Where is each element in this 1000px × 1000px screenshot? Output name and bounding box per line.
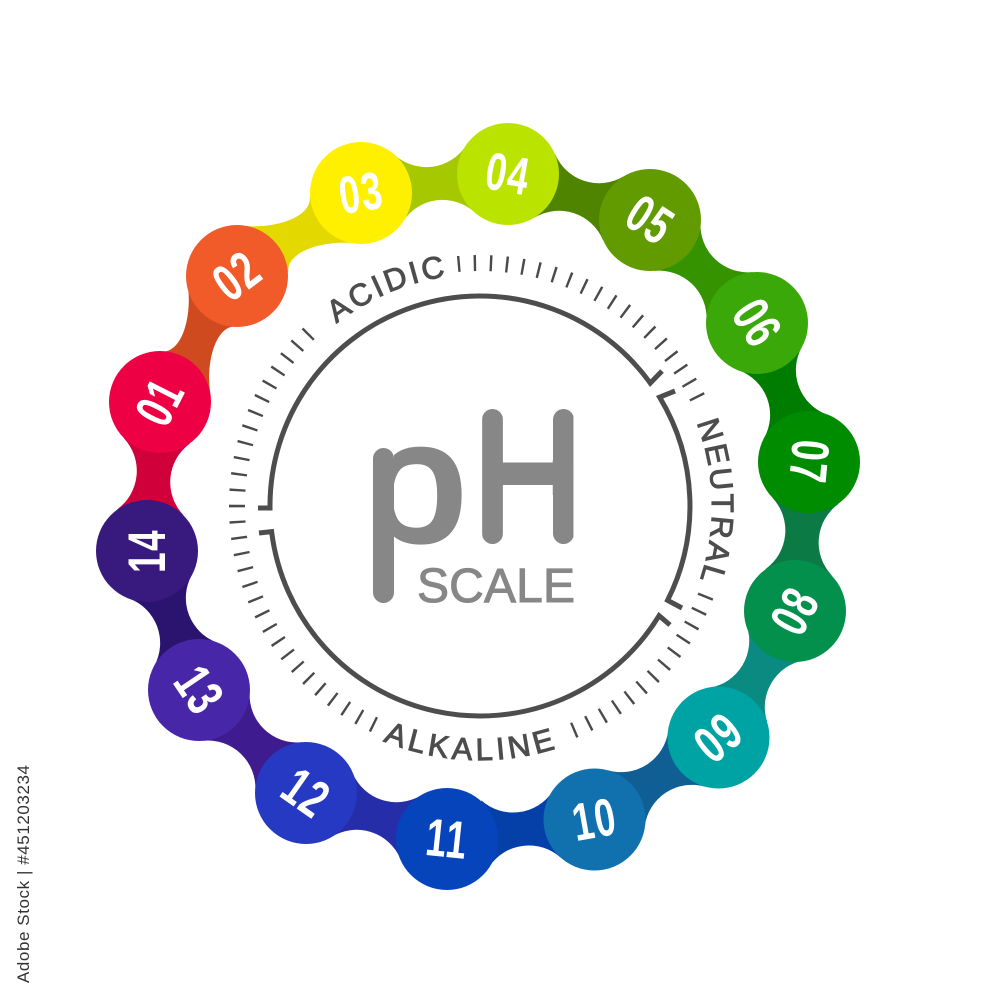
bead 11: 11 — [423, 807, 471, 871]
subtitle: scale: SCALE — [417, 560, 575, 613]
bead 13: 13 — [162, 655, 236, 725]
tick marks — [237, 263, 706, 730]
bead 03 — [310, 142, 412, 244]
bead 13 — [148, 639, 250, 741]
bead 03: 03 — [335, 160, 387, 226]
bead 05 — [599, 169, 701, 271]
title: pH: p — [360, 389, 466, 576]
bead 05: 05 — [615, 183, 685, 257]
bead 01 — [109, 351, 211, 453]
bead 14: 14 — [117, 529, 177, 573]
bead 10 — [544, 768, 646, 870]
title: pH: H — [473, 373, 583, 579]
bead 07 — [758, 411, 860, 513]
bead 10: 10 — [568, 787, 621, 852]
label: neutral: NEUTRAL — [696, 418, 734, 580]
bead 01: 01 — [124, 369, 196, 435]
bead 04 — [457, 123, 559, 225]
bead 06: 06 — [720, 289, 794, 357]
label: alkaline: ALKALINE — [382, 723, 556, 761]
stock id caption: Adobe Stock | #451203234 — [14, 765, 33, 983]
bead 08 — [744, 560, 846, 662]
bead 09: 09 — [683, 701, 754, 774]
bead 04: 04 — [481, 141, 535, 207]
bead 07: 07 — [778, 437, 840, 487]
bead 08: 08 — [759, 578, 831, 644]
bead 11 — [396, 788, 498, 890]
bead 02 — [186, 225, 288, 327]
chain links between pH beads — [117, 146, 839, 867]
bead 09 — [668, 686, 770, 788]
bead 12 — [255, 742, 357, 844]
inner bracket ring — [258, 296, 690, 716]
bead 06 — [706, 272, 808, 374]
bead 14 — [96, 500, 198, 602]
bead 12: 12 — [271, 756, 341, 830]
label: acidic: ACIDIC — [330, 256, 444, 324]
title: pH — [373, 409, 574, 603]
bead 02: 02 — [202, 239, 272, 313]
